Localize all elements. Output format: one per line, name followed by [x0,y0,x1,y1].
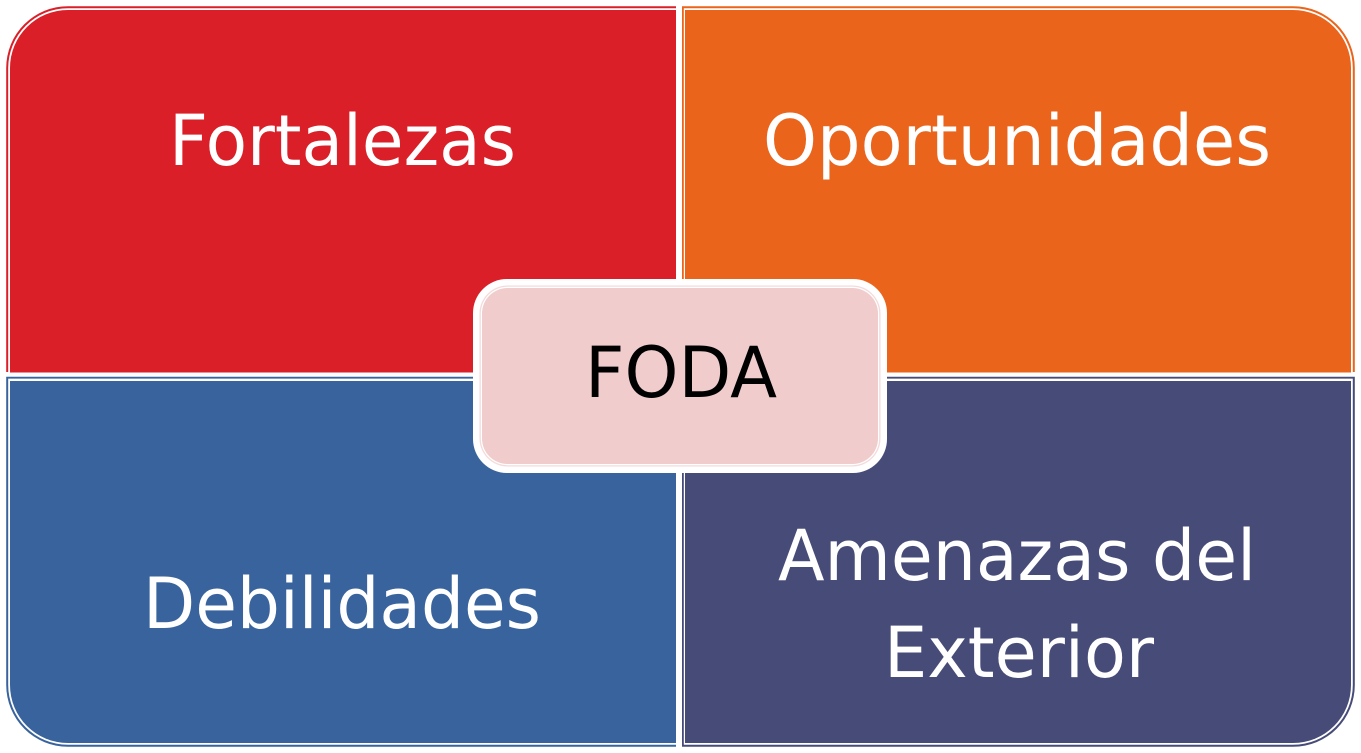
center box: FODA [473,279,887,473]
panel: Debilidades [6,377,676,747]
panel: Fortalezas [6,6,676,372]
label: Amenazas del: Amenazas del [778,515,1256,597]
panel: Fortalezas: Fortalezas [169,100,516,182]
panel: Oportunidades: Oportunidades [763,100,1271,182]
center box: FODA: FODA [585,332,777,414]
label: Exterior: Exterior [884,612,1154,694]
panel: Oportunidades [682,6,1355,372]
panel: Debilidades: Debilidades [143,563,541,645]
panel: Amenazas del Exterior [682,377,1355,747]
